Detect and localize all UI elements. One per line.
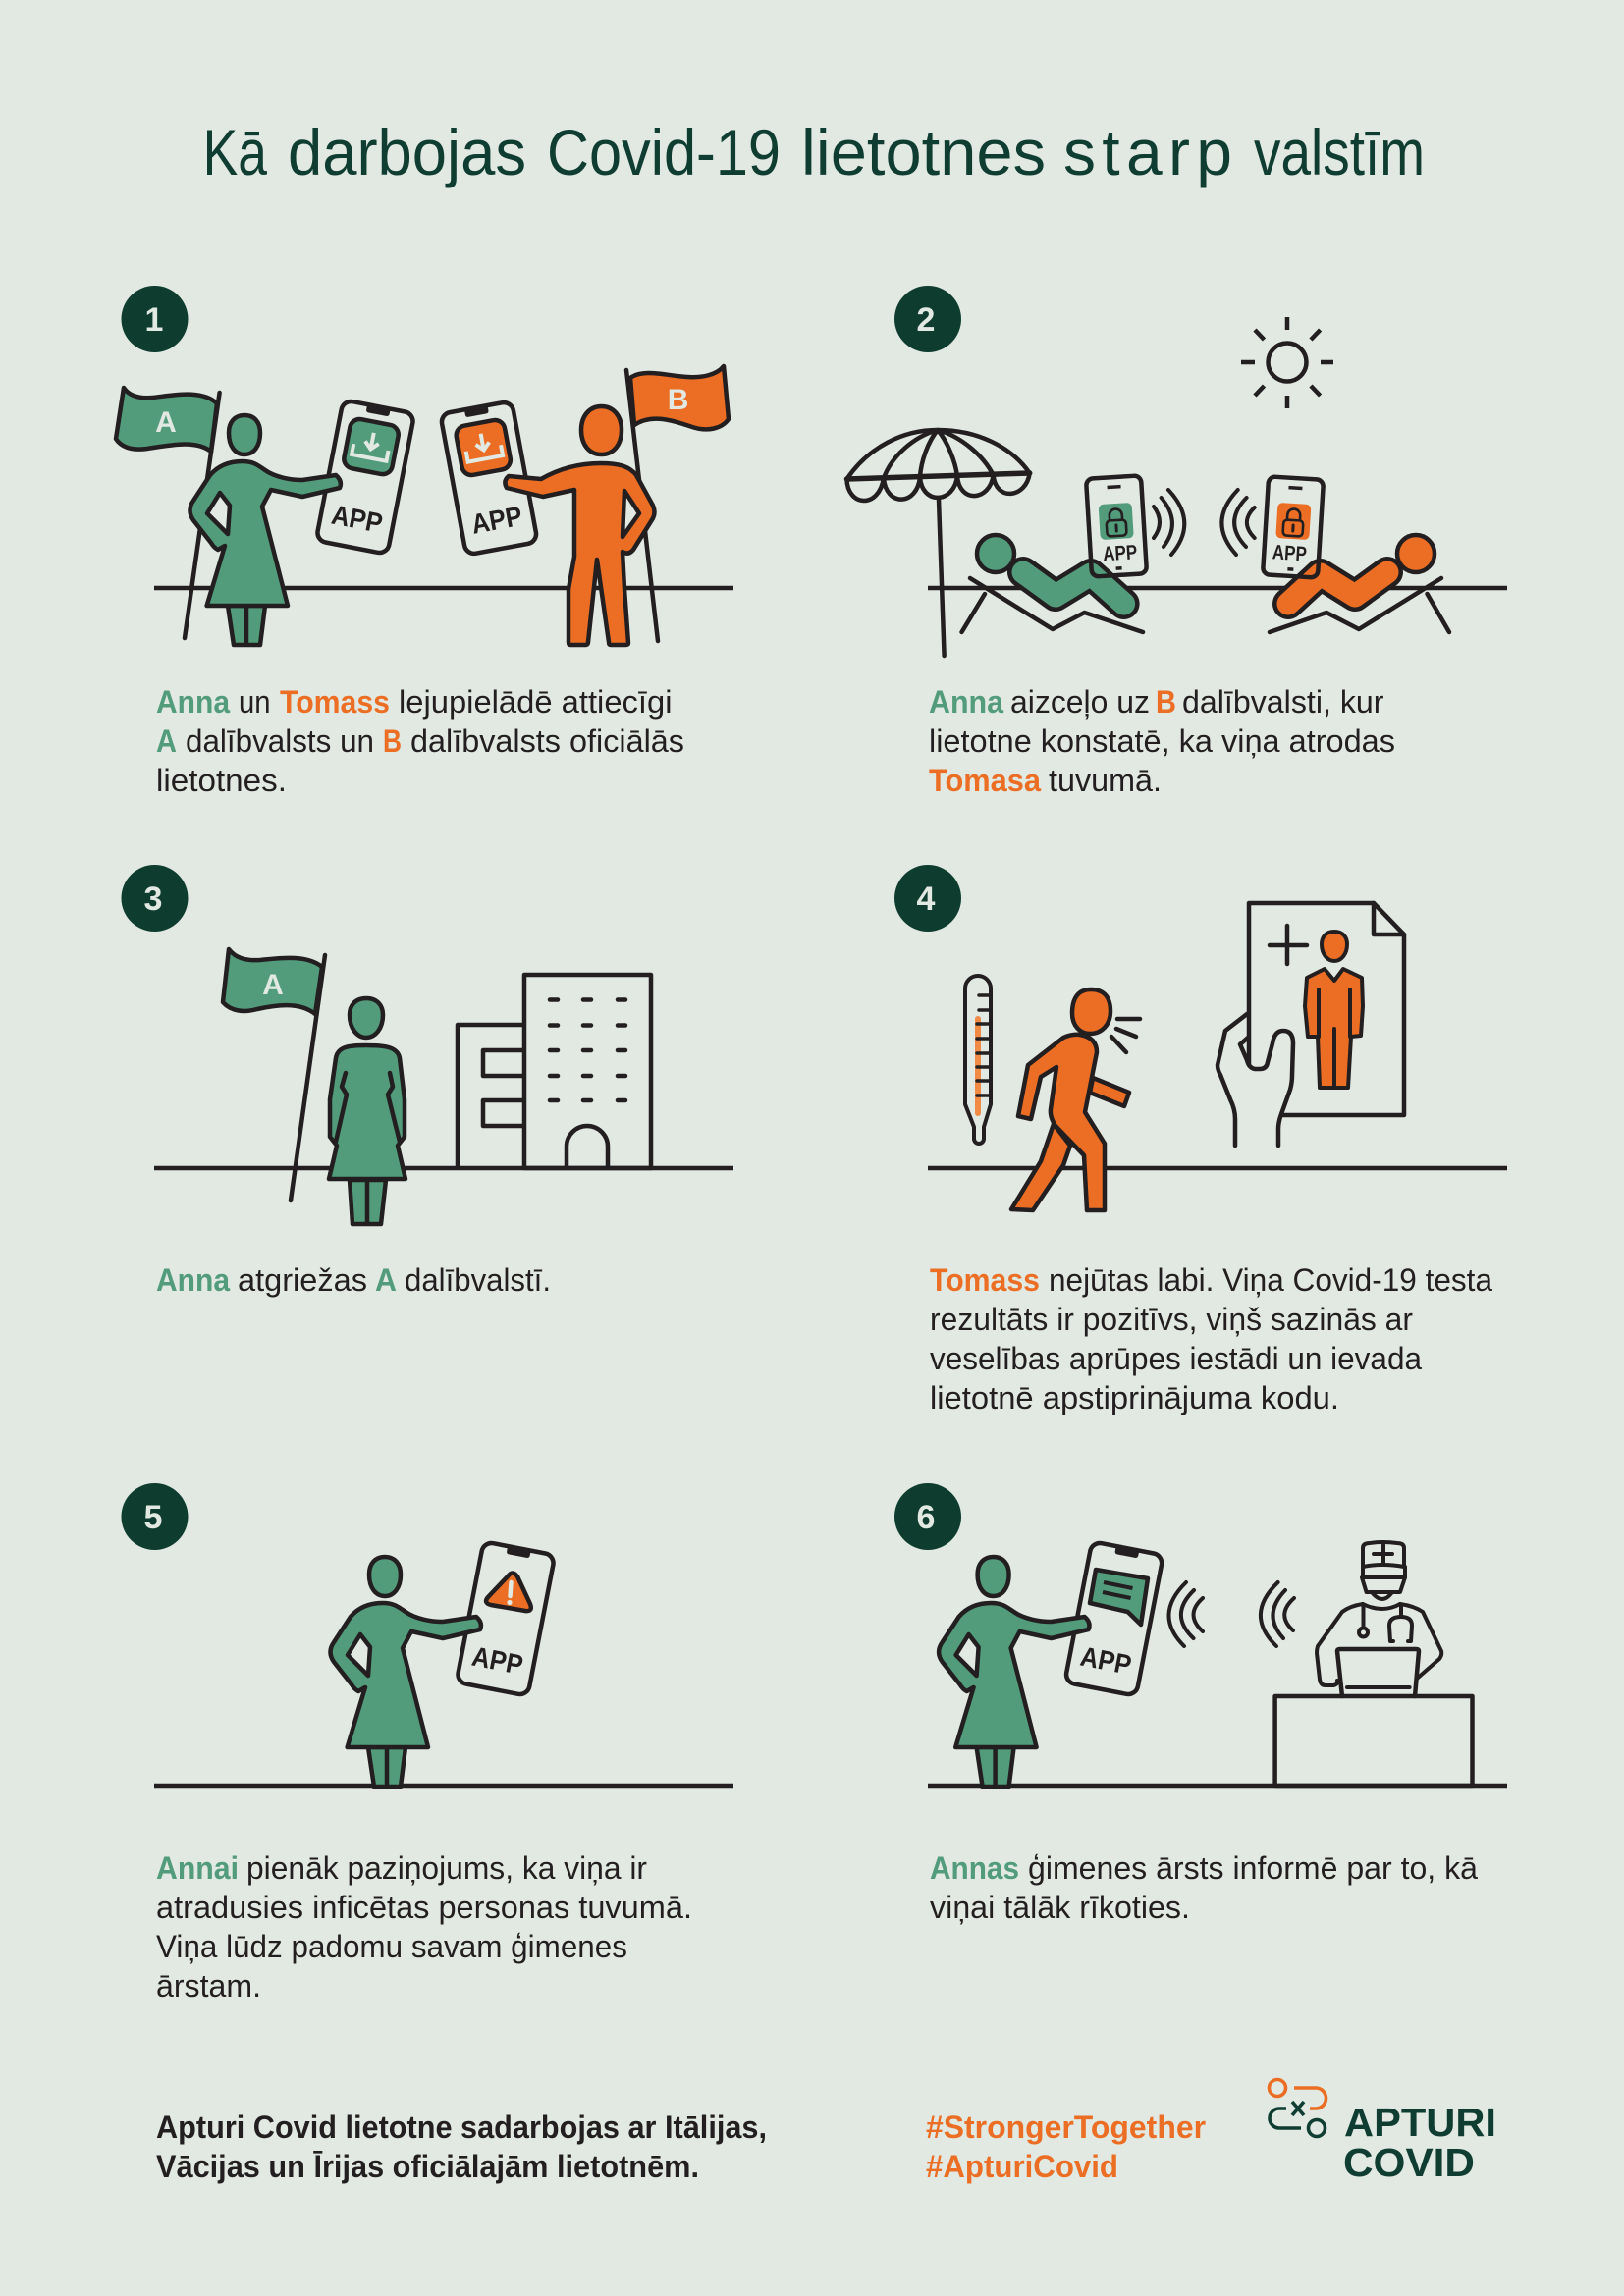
figure: Tomass lying (1288, 535, 1435, 604)
figure: Tomass coughing (1011, 989, 1140, 1210)
icon: test result document held in hand (1218, 903, 1404, 1146)
panel 3: Anna returns (122, 865, 733, 1298)
text panel 3: dalībvalstī. (405, 1262, 551, 1298)
text panel 4 (930, 1262, 1493, 1415)
ground line (928, 1784, 1507, 1788)
text panel 1: dalībvalsts oficiālās (410, 723, 684, 759)
number badge 4: 4 (917, 881, 936, 918)
text panel 1: dalībvalsts un (186, 723, 374, 759)
number badge 5: 5 (144, 1499, 162, 1536)
phone with warning (457, 1541, 555, 1696)
flag A: A (155, 406, 177, 439)
text panel 2: tuvumā. (1049, 763, 1162, 798)
text panel 2: B (1156, 684, 1176, 720)
logo wordmark: APTURI (1344, 2100, 1496, 2145)
text panel 2: Anna (929, 684, 1004, 720)
figure: doctor (1317, 1542, 1441, 1685)
flag A (223, 949, 325, 1201)
title: valstīm (1254, 116, 1425, 188)
text panel 1: lietotnes. (156, 763, 287, 798)
text panel 2: dalībvalsti, kur (1182, 684, 1384, 720)
laptop (1337, 1649, 1419, 1696)
number badge 3: 3 (144, 881, 162, 918)
text panel 6: viņai tālāk rīkoties. (930, 1890, 1190, 1925)
phone right with lock: APP (1272, 541, 1308, 565)
text panel 1: B (383, 723, 402, 759)
text panel 4: Tomass (930, 1262, 1040, 1298)
text panel 1: lejupielādē attiecīgi (399, 684, 672, 720)
text panel 5: Viņa lūdz padomu savam ģimenes (156, 1929, 627, 1964)
text panel 1: un (239, 684, 271, 720)
icon: thermometer (965, 976, 991, 1144)
text panel 3: A (375, 1262, 397, 1298)
phone with message: APP (1078, 1641, 1134, 1681)
panel 2: Anna travels near Tomass (846, 286, 1507, 798)
sun lounger left (962, 578, 1143, 632)
text panel 6 (930, 1850, 1479, 1925)
phone background right (1263, 476, 1324, 578)
text panel 4: lietotnē apstiprinājuma kodu. (930, 1380, 1339, 1415)
figure: Tomass (505, 406, 654, 645)
text panel 1: Tomass (280, 684, 390, 720)
phone with warning: APP (469, 1641, 525, 1681)
phone: Tomass's app download (440, 400, 538, 556)
text panel 5: Annai (156, 1850, 239, 1886)
title: darbojas (288, 116, 526, 188)
logo: Apturi Covid (1269, 2079, 1496, 2185)
text panel 5: ārstam. (156, 1968, 261, 2003)
icon: beach umbrella (846, 430, 1030, 656)
ground line (154, 1166, 733, 1170)
hashtags: #ApturiCovid (926, 2149, 1118, 2184)
title: Kā (203, 116, 267, 188)
figure: Anna front (329, 998, 406, 1224)
text panel 2: Tomasa (929, 763, 1042, 798)
text panel 5: atradusies inficētas personas tuvumā. (156, 1890, 692, 1925)
title: lietotnes (801, 116, 1046, 188)
flag A: A (262, 969, 284, 1001)
signal waves right (1221, 490, 1255, 555)
signal waves left (1154, 490, 1184, 555)
text panel 6: ģimenes ārsts informē par to, kā (1028, 1850, 1479, 1886)
icon: message bubble (1090, 1570, 1148, 1625)
footer statement (156, 2109, 767, 2184)
icon: warning triangle (486, 1573, 531, 1611)
number badge 1 (122, 286, 189, 352)
logo: Apturi Covid: COVID (1343, 2140, 1475, 2185)
signal waves from doctor (1261, 1582, 1294, 1646)
phone left with lock (1086, 475, 1147, 577)
figure: Anna lying (977, 535, 1124, 604)
text panel 5 (156, 1850, 692, 2003)
flag B: B (668, 384, 688, 416)
text panel 2 (929, 684, 1395, 798)
figure: Anna (190, 415, 341, 645)
text panel 1: A (156, 723, 177, 759)
hashtags: #StrongerTogether (926, 2109, 1206, 2145)
flag B (626, 366, 729, 641)
panel 1: downloading the apps (116, 286, 733, 798)
number badge 6: 6 (917, 1499, 935, 1536)
text panel 2: lietotne konstatē, ka viņa atrodas (929, 723, 1395, 759)
text panel 4: nejūtas labi. Viņa Covid-19 testa (1049, 1262, 1493, 1298)
ground line (928, 586, 1507, 590)
panel 5: Anna receives a notification (122, 1483, 733, 2003)
hashtags (926, 2109, 1206, 2184)
flag A (116, 388, 220, 638)
number badge 3 (122, 865, 189, 932)
text panel 5: pienāk paziņojums, ka viņa ir (246, 1850, 647, 1886)
number badge 6 (894, 1483, 961, 1550)
phone: Tomass's app download: APP (469, 501, 524, 540)
ground line (154, 1784, 733, 1788)
phone right with lock (1263, 476, 1324, 578)
phone: Anna's app download (316, 400, 414, 555)
figure: Anna (939, 1557, 1090, 1787)
ground line (928, 1166, 1507, 1170)
number badge 5 (122, 1483, 189, 1550)
text panel 1: Anna (156, 684, 231, 720)
title: starp (1063, 116, 1232, 188)
icon: sun (1241, 317, 1333, 408)
phone with message (1064, 1541, 1164, 1696)
number badge 4 (894, 865, 961, 932)
title: Covid-19 (547, 116, 781, 188)
text panel 3: Anna (156, 1262, 231, 1298)
text panel 3: atgriežas (238, 1262, 367, 1298)
panel 6: family doctor informs Anna (894, 1483, 1507, 1925)
figure: Anna (330, 1557, 481, 1787)
building (458, 975, 651, 1168)
footer statement: Apturi Covid lietotne sadarbojas ar Itālijas, (156, 2109, 767, 2145)
text panel 4: veselības aprūpes iestādi un ievada (930, 1341, 1423, 1376)
sun lounger right (1270, 578, 1449, 632)
text panel 1 (156, 684, 684, 798)
phone: Anna's app download: APP (329, 500, 385, 539)
logo mark (1269, 2079, 1326, 2136)
number badge 1: 1 (145, 301, 163, 339)
number badge 2 (894, 286, 961, 352)
phone left with lock: APP (1103, 541, 1138, 565)
text panel 4: rezultāts ir pozitīvs, viņš sazinās ar (930, 1302, 1413, 1337)
panel 4: Tomass tests positive (894, 865, 1507, 1415)
text panel 2: aizceļo uz (1010, 684, 1150, 720)
signal waves from phone (1168, 1582, 1203, 1646)
ground line (154, 586, 733, 590)
phone background left (1086, 475, 1147, 577)
footer statement: Vācijas un Īrijas oficiālajām lietotnēm. (156, 2149, 699, 2184)
number badge 2: 2 (917, 301, 935, 339)
desk (1275, 1696, 1473, 1786)
text panel 6: Annas (930, 1850, 1019, 1886)
